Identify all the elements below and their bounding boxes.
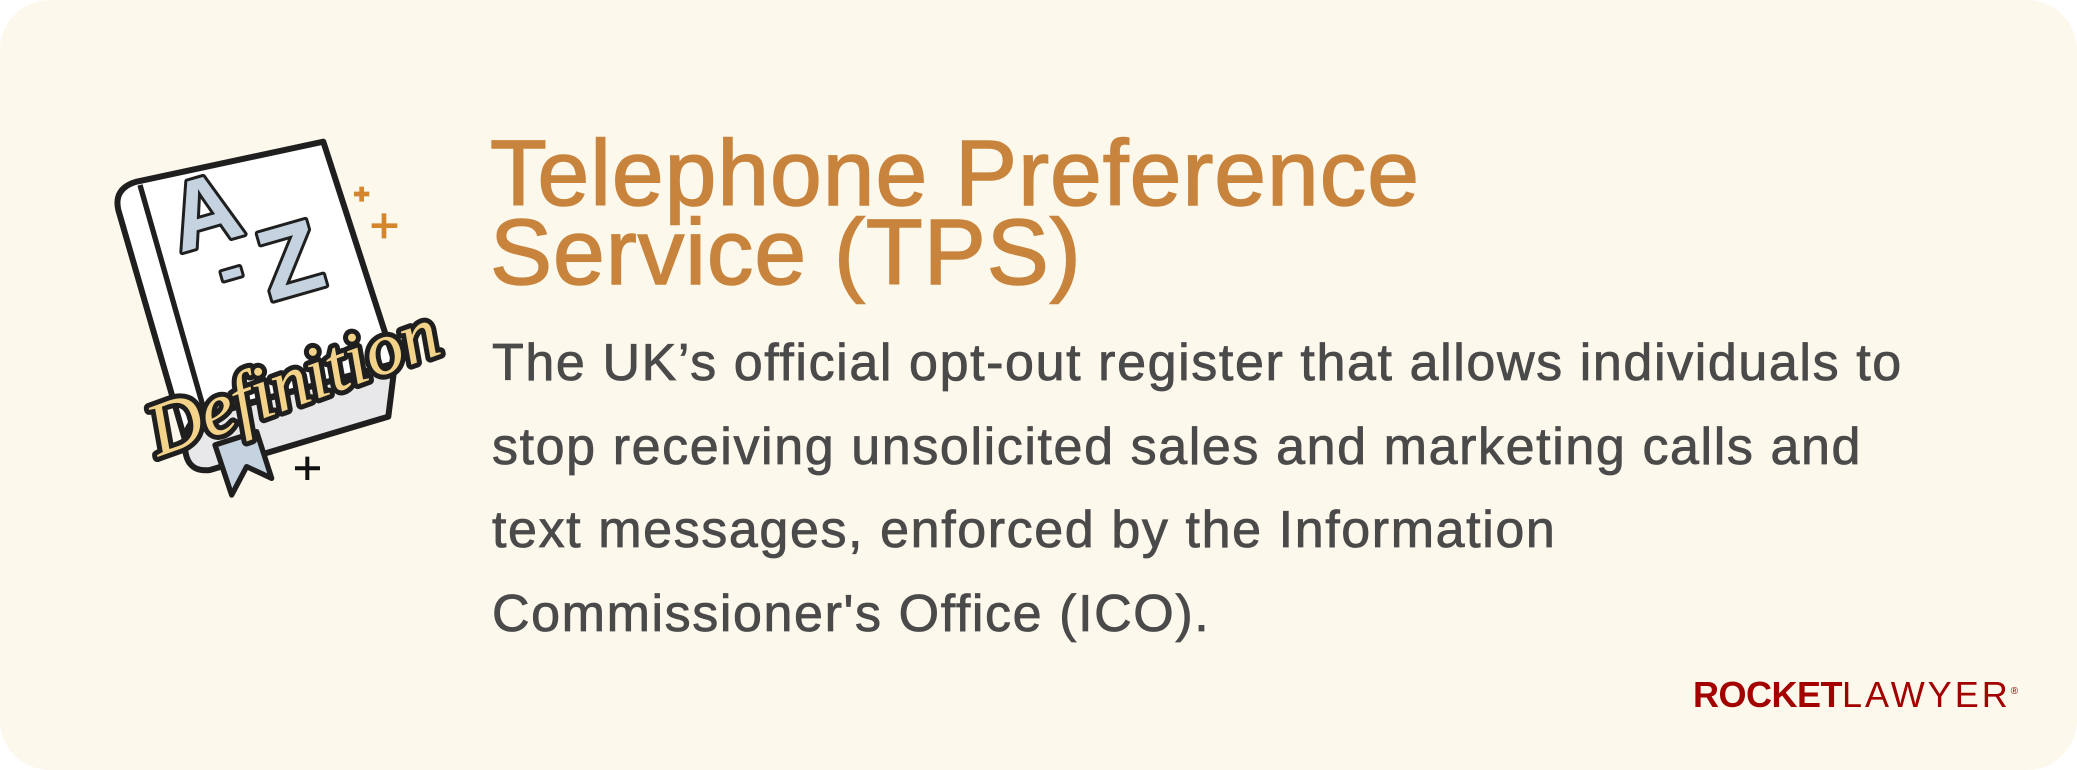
title [490, 121, 1420, 304]
book pages [185, 363, 395, 470]
definition text: stop receiving unsolicited sales and marketing calls and [492, 418, 1862, 476]
title: Telephone Preference [490, 121, 1420, 225]
definition text: Commissioner's Office (ICO). [492, 584, 1210, 642]
book cover [117, 142, 395, 440]
letters A-Z: Z [245, 198, 335, 323]
definition script: Definition [135, 291, 450, 473]
letters A-Z [156, 133, 335, 343]
letters A-Z: A [156, 151, 253, 273]
title: Service (TPS) [490, 200, 1082, 304]
definition text [492, 334, 1903, 642]
definition text: The UK’s official opt-out register that allows individuals to [492, 334, 1903, 392]
bookmark [215, 432, 272, 495]
logo: Rocket Lawyer: ROCKETLAWYER® [1693, 674, 2018, 715]
definition text: text messages, enforced by the Information [492, 501, 1556, 559]
icon: A-Z definition book [114, 138, 450, 498]
letters A-Z: - [207, 225, 253, 311]
sparkles [354, 187, 397, 238]
